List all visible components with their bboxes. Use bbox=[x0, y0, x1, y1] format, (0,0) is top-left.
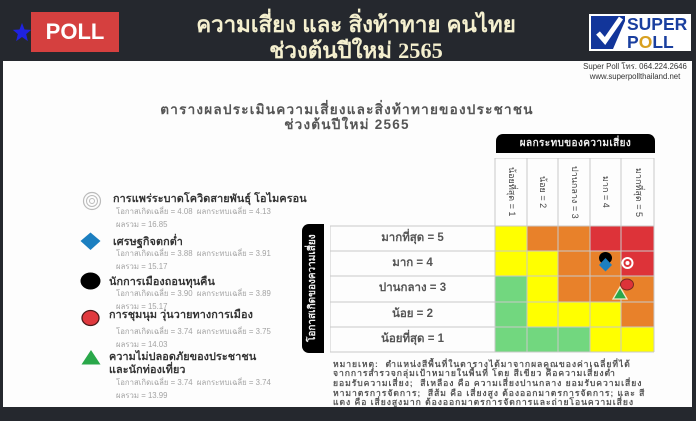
chart heading: ช่วงต้นปีใหม่ 2565 bbox=[284, 117, 410, 132]
impact header bbox=[496, 134, 655, 153]
heading: และนักท่องเที่ยว bbox=[109, 364, 186, 376]
stats bbox=[116, 206, 271, 228]
risk matrix bbox=[330, 158, 654, 352]
marker: protests bbox=[620, 279, 634, 290]
title: ความเสี่ยง และ สิ่งท้าทาย คนไทย bbox=[196, 12, 516, 37]
matrix grid bbox=[330, 158, 654, 352]
stats bbox=[116, 377, 271, 400]
note line 5: แดง คือ เสี่ยงสูงมาก ต้องออกมาตรการจัดการและถ่ายโอนความเสี่ยง bbox=[333, 396, 634, 406]
logo text: POLL bbox=[627, 32, 674, 52]
column 3: ปานกลาง = 3 bbox=[570, 166, 580, 218]
heading: การชุมนุม วุ่นวายทางการเมือง bbox=[109, 308, 253, 320]
column labels bbox=[506, 166, 646, 218]
legend: safety bbox=[82, 350, 271, 400]
contact info: Super Poll โทร. 064.224.2646 bbox=[583, 62, 687, 71]
heading: เศรษฐกิจตกต่ำ bbox=[113, 236, 183, 248]
chart heading bbox=[160, 100, 534, 132]
stats: ผลรวม = 15.17 bbox=[116, 302, 167, 310]
icon: check mark bbox=[591, 16, 625, 49]
chart heading: ตารางผลประเมินความเสี่ยงและสิ่งท้าทายของประชาชน bbox=[160, 102, 534, 117]
note line 2: จากการสำรวจกลุ่มเป้าหมายในพื้นที่ โดย สีเขียว คือความเสี่ยงต่ำ bbox=[333, 368, 616, 378]
marker: omicron bbox=[622, 257, 634, 269]
poll label bbox=[31, 12, 119, 52]
marker: safety bbox=[613, 287, 627, 299]
heading: การแพร่ระบาดโควิดสายพันธุ์ โอไมครอน bbox=[113, 192, 307, 204]
note line 4: หามาตรการจัดการ; สีส้ม คือ เสี่ยงสูง ต้องออกมาตรการจัดการ; และ สี bbox=[333, 388, 645, 398]
marker: politicians bbox=[599, 252, 612, 264]
heading bbox=[109, 350, 256, 376]
logo text bbox=[627, 14, 687, 52]
row 4: มาก = 4 bbox=[392, 257, 433, 269]
stats: ผลรวม = 14.03 bbox=[116, 340, 167, 348]
footnote bbox=[333, 358, 645, 407]
legend: economy bbox=[80, 232, 271, 270]
stats: ผลรวม = 13.99 bbox=[116, 390, 167, 400]
logo: super poll bbox=[589, 14, 691, 51]
contact info: www.superpollthailand.net bbox=[590, 72, 680, 80]
column 4: มาก = 4 bbox=[601, 176, 611, 208]
row 1: น้อยที่สุด = 1 bbox=[381, 333, 444, 345]
icon: black circle bbox=[80, 272, 100, 290]
impact header: ผลกระทบของความเสี่ยง bbox=[520, 138, 631, 149]
matrix markers bbox=[599, 252, 634, 300]
note line 3: ยอมรับความเสี่ยง; สีเหลือง คือ ความเสี่ยงปานกลาง ยอมรับความเสี่ยง bbox=[333, 378, 642, 388]
contact info bbox=[583, 62, 687, 80]
icon: green triangle bbox=[82, 350, 100, 364]
poll label: POLL bbox=[46, 19, 104, 44]
stats: โอกาสเกิดเฉลี่ย = 3.74 ผลกระทบเฉลี่ย = 3.75 bbox=[116, 326, 271, 336]
icon: concentric circles bbox=[82, 192, 102, 210]
legend: politicians bbox=[80, 272, 271, 310]
row 3: ปานกลาง = 3 bbox=[379, 282, 446, 294]
marker: economy bbox=[599, 258, 612, 272]
legend: omicron bbox=[82, 192, 307, 228]
stats: โอกาสเกิดเฉลี่ย = 4.08 ผลกระทบเฉลี่ย = 4.13 bbox=[116, 206, 271, 216]
title bbox=[196, 8, 516, 63]
heading: นักการเมืองถอนทุนคืน bbox=[109, 276, 215, 288]
likelihood header bbox=[302, 224, 324, 353]
logo text: SUPER bbox=[627, 14, 687, 34]
stats bbox=[116, 326, 271, 348]
title: ช่วงต้นปีใหม่ 2565 bbox=[269, 38, 443, 63]
row labels bbox=[379, 228, 446, 346]
row 5: มากที่สุด = 5 bbox=[381, 232, 444, 244]
icon: blue diamond bbox=[80, 232, 100, 250]
stats bbox=[116, 248, 271, 270]
stats: โอกาสเกิดเฉลี่ย = 3.90 ผลกระทบเฉลี่ย = 3.89 bbox=[116, 288, 271, 298]
heading: ความไม่ปลอดภัยของประชาชน bbox=[109, 351, 256, 363]
poll badge bbox=[13, 12, 119, 52]
stats: โอกาสเกิดเฉลี่ย = 3.74 ผลกระทบเฉลี่ย = 3.74 bbox=[116, 378, 271, 386]
column 5: มากที่สุด = 5 bbox=[634, 168, 644, 216]
note line 1: หมายเหตุ: ตำแหน่งสีพื้นที่ในตารางได้มาจากผลคูณของค่าเฉลี่ยที่ได้ bbox=[333, 358, 631, 368]
row 2: น้อย = 2 bbox=[392, 308, 433, 320]
stats: ผลรวม = 15.17 bbox=[116, 262, 167, 270]
icon: blue star bbox=[13, 23, 31, 41]
stats bbox=[116, 288, 271, 310]
icon: red circle bbox=[81, 310, 100, 326]
stats: โอกาสเกิดเฉลี่ย = 3.88 ผลกระทบเฉลี่ย = 3.91 bbox=[116, 248, 271, 258]
column 2: น้อย = 2 bbox=[538, 176, 548, 208]
stats: ผลรวม = 16.85 bbox=[116, 220, 167, 228]
column 1: น้อยที่สุด = 1 bbox=[507, 167, 517, 217]
likelihood header: โอกาสเกิดของความเสี่ยง bbox=[307, 235, 318, 342]
legend: protests bbox=[81, 308, 271, 348]
